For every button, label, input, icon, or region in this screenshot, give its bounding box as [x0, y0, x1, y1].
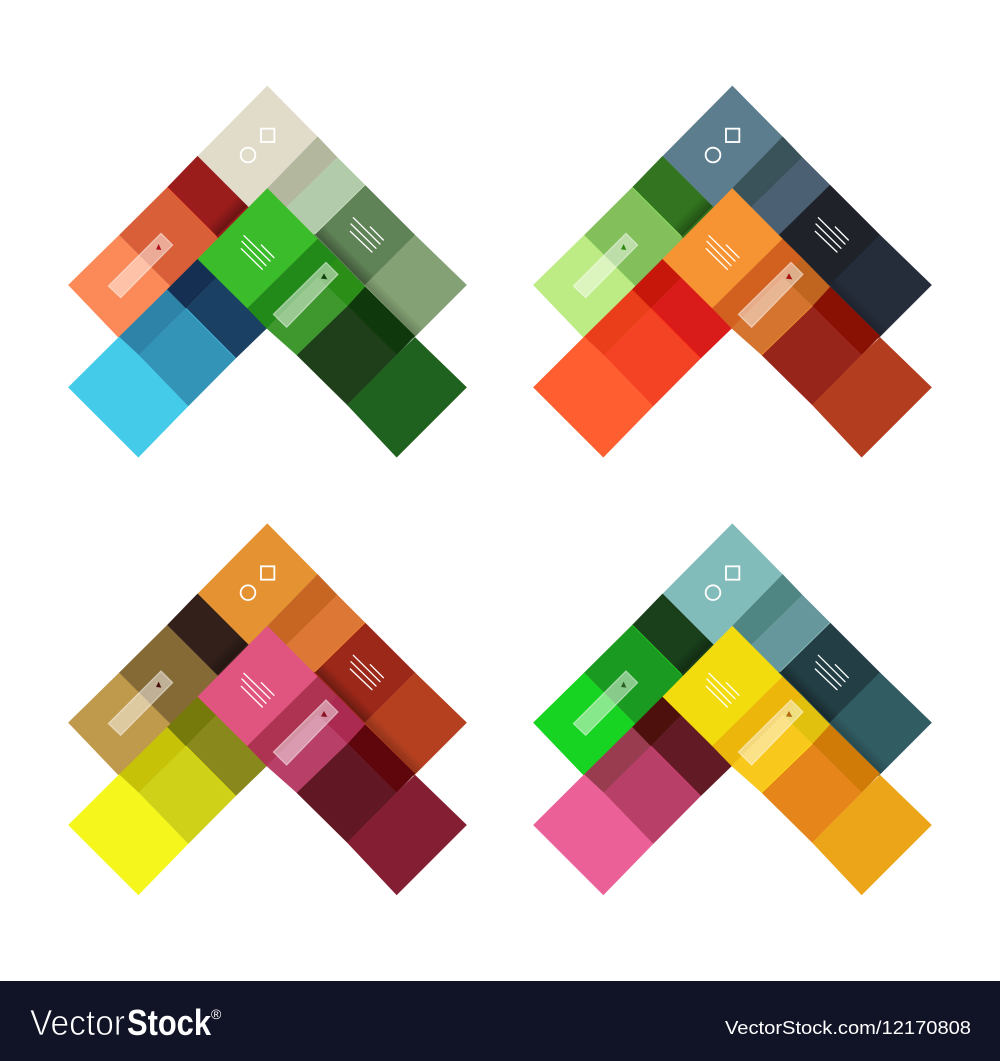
upper right band [732, 137, 932, 338]
icon: arrow right [786, 273, 792, 279]
upper left band [533, 594, 715, 776]
upper left band [68, 594, 250, 776]
lower right band [297, 724, 467, 895]
icon: square [726, 129, 739, 142]
footer logo: Vector [30, 1002, 125, 1043]
icon: text lines centre [241, 236, 274, 269]
icon: text lines centre [706, 673, 739, 707]
icon: text lines centre [706, 236, 739, 269]
icon: arrow left [621, 244, 626, 250]
label bar right [738, 262, 803, 327]
panel: arrow bottom right [533, 523, 932, 895]
top tile [663, 523, 783, 646]
top tile [198, 86, 318, 208]
icon: text lines right [815, 655, 848, 690]
upper right band [267, 137, 467, 338]
upper right band [267, 574, 467, 776]
icon: arrow left [156, 682, 161, 688]
icon: arrow right [321, 711, 327, 717]
label bar left [573, 233, 638, 298]
top tile [663, 86, 783, 208]
lower left band [68, 257, 269, 457]
panel: arrow top right [533, 86, 932, 457]
upper left band [68, 156, 250, 338]
lower right band [762, 724, 932, 895]
centre tile [198, 188, 365, 355]
footer logo [30, 1002, 222, 1043]
label bar left [108, 233, 173, 298]
label bar right [738, 700, 803, 765]
panel: arrow bottom left [68, 523, 467, 895]
icon: arrow left [156, 244, 161, 250]
icon: arrow right [786, 711, 792, 717]
footer logo: ® [211, 1006, 222, 1022]
lower left band [68, 694, 269, 895]
icon: text lines centre [241, 673, 274, 707]
lower left band [533, 694, 734, 895]
centre tile [663, 626, 830, 793]
icon: text lines right [350, 218, 383, 252]
icon: arrow left [621, 682, 626, 688]
icon: circle [241, 148, 255, 162]
lower right band [297, 287, 467, 457]
footer bar [0, 981, 1000, 1061]
top tile [198, 523, 318, 646]
icon: text lines right [350, 655, 383, 690]
upper left band [533, 156, 715, 338]
icon: square [726, 566, 739, 580]
centre tile [198, 626, 365, 793]
label bar left [108, 671, 173, 735]
icon: circle [706, 585, 720, 600]
icon: square [261, 566, 274, 580]
lower right band [762, 287, 932, 457]
footer logo: Stock [127, 1002, 212, 1043]
upper right band [732, 574, 932, 776]
icon: arrow right [321, 273, 327, 279]
icon: square [261, 129, 274, 142]
label bar left [573, 671, 638, 735]
label bar right [273, 700, 338, 765]
icon: text lines right [815, 218, 848, 252]
centre tile [663, 188, 830, 355]
label bar right [273, 262, 338, 327]
icon: circle [241, 585, 255, 600]
footer image id: VectorStock.com/12170808 [725, 1018, 971, 1038]
panel: arrow top left [68, 86, 467, 457]
icon: circle [706, 148, 720, 162]
lower left band [533, 257, 734, 457]
